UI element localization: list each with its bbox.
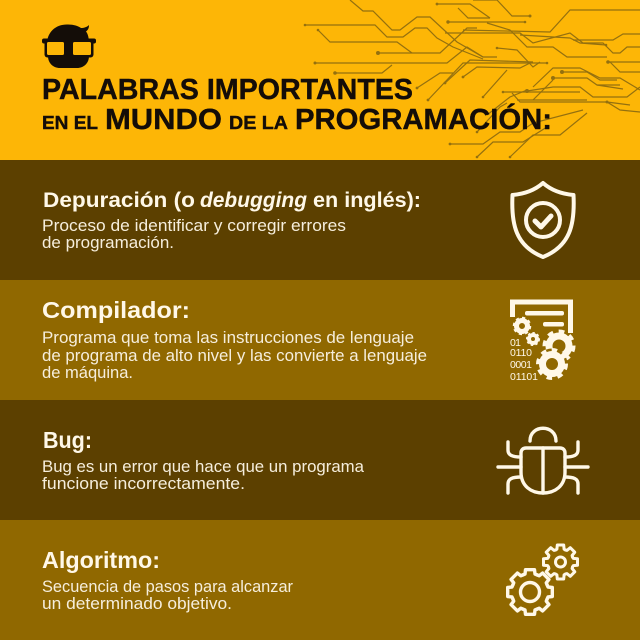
algoritmo description: Secuencia de pasos para alcanzar (42, 577, 293, 596)
compilador description: de máquina. (42, 363, 133, 382)
icon: code document with gears: 01 (510, 337, 521, 349)
title: PROGRAMACIÓN: (295, 102, 552, 136)
title: PALABRAS IMPORTANTES (42, 74, 413, 106)
header background (0, 0, 640, 160)
panel: bug (0, 400, 640, 520)
depuración band (0, 160, 640, 280)
depuración heading: Depuración (o (43, 189, 195, 212)
icon: shield with check (512, 183, 574, 257)
icon: code document with gears: 01101 (510, 371, 538, 383)
compilador band (0, 280, 640, 400)
depuración heading (43, 189, 421, 212)
panel: compilador (0, 280, 640, 400)
title: DE LA (229, 113, 288, 133)
algoritmo band (0, 520, 640, 640)
depuración heading: en inglés): (313, 189, 421, 212)
trace end dots (304, 3, 610, 158)
bug heading: Bug: (43, 427, 92, 453)
title (42, 74, 552, 136)
algoritmo description: un determinado objetivo. (42, 594, 232, 613)
title: MUNDO (105, 104, 222, 136)
bug description (42, 457, 365, 493)
bug description: Bug es un error que hace que un programa (42, 457, 365, 476)
icon: nerd head with glasses (42, 24, 96, 68)
compilador description: Programa que toma las instrucciones de lenguaje (42, 328, 414, 347)
depuración description (42, 216, 346, 252)
depuración description: Proceso de identificar y corregir errores (42, 216, 346, 235)
panel: header (0, 0, 640, 160)
bug band (0, 400, 640, 520)
bug description: funcione incorrectamente. (42, 474, 245, 493)
icon: code document with gears: 0001 (510, 359, 532, 371)
circuit board traces (304, 0, 640, 158)
icon: code document with gears (510, 302, 574, 383)
compilador description: de programa de alto nivel y las convierte a lenguaje (42, 346, 427, 365)
algoritmo description (42, 577, 293, 613)
icon: code document with gears: 0110 (510, 347, 532, 359)
compilador description (42, 328, 427, 382)
icon: bug (498, 428, 588, 493)
panel: depuración (0, 160, 640, 280)
icon: two gears (508, 545, 578, 614)
algoritmo heading: Algoritmo: (42, 547, 160, 573)
title: EN EL (42, 113, 98, 133)
depuración description: de programación. (42, 233, 174, 252)
compilador heading: Compilador: (42, 297, 190, 323)
depuración heading: debugging (200, 189, 307, 212)
panel: algoritmo (0, 520, 640, 640)
